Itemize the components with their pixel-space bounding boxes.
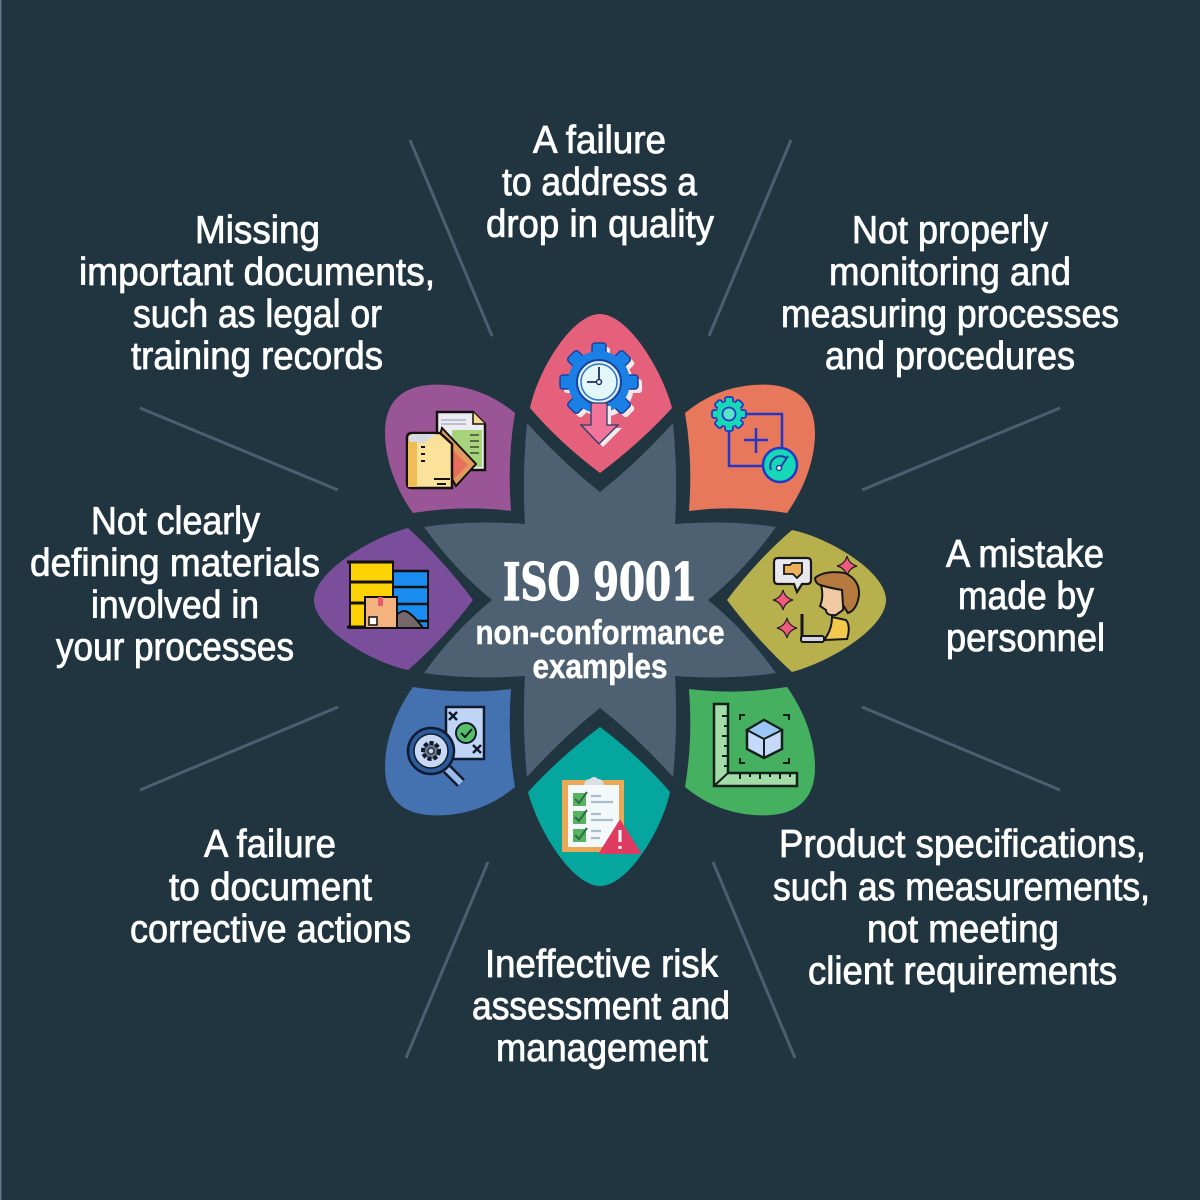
label: right: personnel <box>946 617 1105 660</box>
label: lower left <box>130 823 411 951</box>
label: bottom: management <box>496 1027 708 1070</box>
label: lower right: Product specifications, <box>779 823 1146 866</box>
icon: person at laptop with thumbs down bubble <box>773 556 859 642</box>
label: lower right <box>773 823 1150 993</box>
label: lower right: such as measurements, <box>773 866 1150 909</box>
label: top: A failure <box>533 119 666 162</box>
icon: magnifier with gear over document <box>408 707 484 783</box>
label: top: to address a <box>502 161 697 204</box>
label: upper right: measuring processes <box>781 293 1119 336</box>
label: left: Not clearly <box>91 500 260 543</box>
icon: checklist clipboard with warning <box>562 777 640 853</box>
label: bottom <box>472 943 730 1070</box>
label: top <box>486 119 714 246</box>
icon: process gear, plus and gauge <box>712 397 797 482</box>
label: lower left: corrective actions <box>130 908 411 951</box>
petal: lower left, corrective actions <box>385 687 515 815</box>
label: left: defining materials <box>30 542 320 585</box>
label: top: drop in quality <box>486 203 714 246</box>
petal: top, failure to address quality drop <box>530 314 672 473</box>
petal: lower right, product specifications <box>685 687 815 815</box>
label: lower left: A failure <box>204 823 336 866</box>
label: upper left: Missing <box>195 209 320 252</box>
label: left <box>30 500 320 669</box>
center title: non-conformance <box>476 614 724 652</box>
label: upper right: Not properly <box>852 209 1048 252</box>
label: bottom: assessment and <box>472 985 730 1028</box>
petal: upper right, monitoring and measuring <box>685 385 815 513</box>
center star <box>424 423 776 777</box>
label: upper right: and procedures <box>825 335 1075 378</box>
label: upper left: training records <box>131 335 383 378</box>
label: lower left: to document <box>169 866 372 909</box>
icon: files and folder <box>407 412 485 488</box>
petal: left, materials <box>314 528 473 670</box>
center title: ISO 9001 <box>503 553 697 613</box>
icon: gear with clock and down arrow <box>560 343 642 447</box>
petal: bottom, risk assessment <box>528 727 670 886</box>
label: lower right: not meeting <box>867 908 1059 951</box>
label: right <box>946 533 1105 660</box>
label: right: made by <box>958 575 1094 618</box>
label: upper left <box>79 209 435 378</box>
label: upper left: such as legal or <box>133 293 382 336</box>
label: lower right: client requirements <box>808 950 1117 993</box>
label: upper right <box>781 209 1119 378</box>
label: right: A mistake <box>946 533 1104 576</box>
center title: examples <box>532 648 668 686</box>
icon: barrels, box and pile <box>347 562 429 628</box>
petal: right, personnel mistake <box>727 530 886 672</box>
label: upper left: important documents, <box>79 251 435 294</box>
center title <box>476 553 724 686</box>
icon: ruler and cube <box>714 704 797 786</box>
label: left: your processes <box>56 626 294 669</box>
label: left: involved in <box>91 584 259 627</box>
label: bottom: Ineffective risk <box>485 943 718 986</box>
label: upper right: monitoring and <box>829 251 1071 294</box>
petal: upper left, documents <box>385 385 515 513</box>
